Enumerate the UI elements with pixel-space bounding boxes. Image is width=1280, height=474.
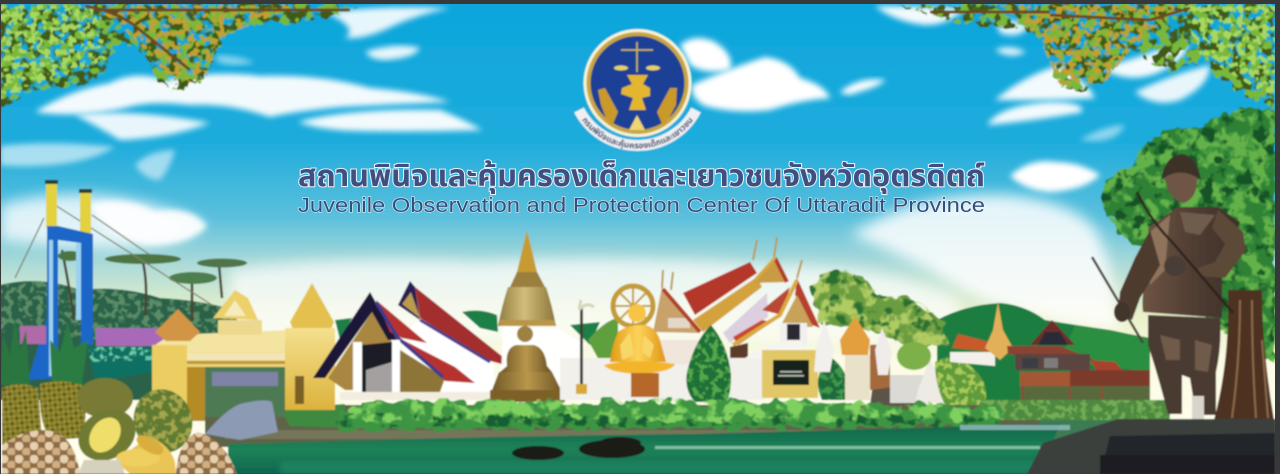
durians	[69, 378, 201, 471]
top dark border	[0, 0, 1280, 4]
branch right	[930, 8, 1190, 20]
trees behind chedis	[812, 271, 950, 345]
waterfall	[205, 400, 278, 440]
right tree canopy	[1103, 109, 1276, 420]
pineapples	[0, 318, 88, 447]
Thai title: สถานพินิจและคุ้มครองเด็กและเยาวชนจังหวัดอุตรดิตถ์	[298, 159, 985, 194]
statue head	[1161, 154, 1201, 203]
branch left	[85, 6, 350, 70]
traditional wooden house	[1007, 320, 1150, 400]
golden temple	[653, 237, 820, 364]
shrubs along river	[335, 399, 1005, 430]
clouds	[0, 6, 1210, 340]
statue torso	[1142, 207, 1240, 318]
gate central pediment	[213, 290, 258, 320]
logo golden stand	[621, 75, 650, 110]
logo scales of justice	[614, 42, 660, 72]
foliage top right	[900, 5, 1275, 108]
logo lotus	[629, 115, 645, 130]
golden city gate	[152, 283, 335, 440]
river rocks	[512, 437, 645, 460]
background forest left	[0, 250, 247, 400]
foliage top left	[0, 5, 360, 112]
English title: Juvenile Observation and Protection Center Of Uttaradit Province	[298, 194, 985, 217]
logo ribbon	[579, 110, 696, 145]
white temple wall	[560, 358, 765, 400]
chedis and white pagodas	[814, 316, 950, 405]
hero bronze statue	[1092, 154, 1246, 419]
logo nagas	[598, 88, 677, 126]
bridge cables	[15, 205, 212, 305]
suspension bridge	[15, 180, 212, 380]
pale green trees	[897, 342, 986, 405]
logo emblem	[573, 28, 702, 152]
red roof temple and chedi on right	[950, 302, 1013, 366]
right dark border	[1275, 0, 1280, 474]
statue pedestal	[1027, 419, 1276, 474]
spires	[662, 237, 802, 290]
river bank and lawn	[205, 404, 1075, 447]
logo ribbon text: กรมพินิจและคุ้มครองเด็กและเยาวชน	[582, 117, 694, 150]
left dark border	[0, 0, 1, 474]
small dark tree	[818, 358, 849, 400]
river bank greenery right	[980, 400, 1170, 455]
cypress tree	[686, 325, 731, 402]
river water	[228, 424, 1070, 474]
mountains	[335, 303, 1150, 400]
sign board	[762, 350, 818, 398]
arch scene	[205, 367, 285, 417]
statue arms	[1114, 210, 1246, 322]
gate left pavilion	[155, 309, 200, 341]
flat-top trees	[58, 250, 247, 320]
scabbard	[1137, 192, 1233, 313]
stupa	[498, 230, 585, 400]
tree trunk	[1214, 290, 1274, 420]
longkong fruit	[2, 430, 237, 474]
durian flesh	[78, 431, 176, 474]
flower and hedge beds	[20, 326, 164, 382]
lamp post	[576, 300, 594, 394]
gold Buddha with dharma wheel	[604, 286, 675, 397]
bronze seated Buddha	[490, 326, 565, 402]
sword staff	[1092, 257, 1143, 343]
statue legs	[1148, 315, 1220, 419]
gate right tower	[290, 283, 334, 332]
Thai temple with red roof	[313, 281, 505, 400]
